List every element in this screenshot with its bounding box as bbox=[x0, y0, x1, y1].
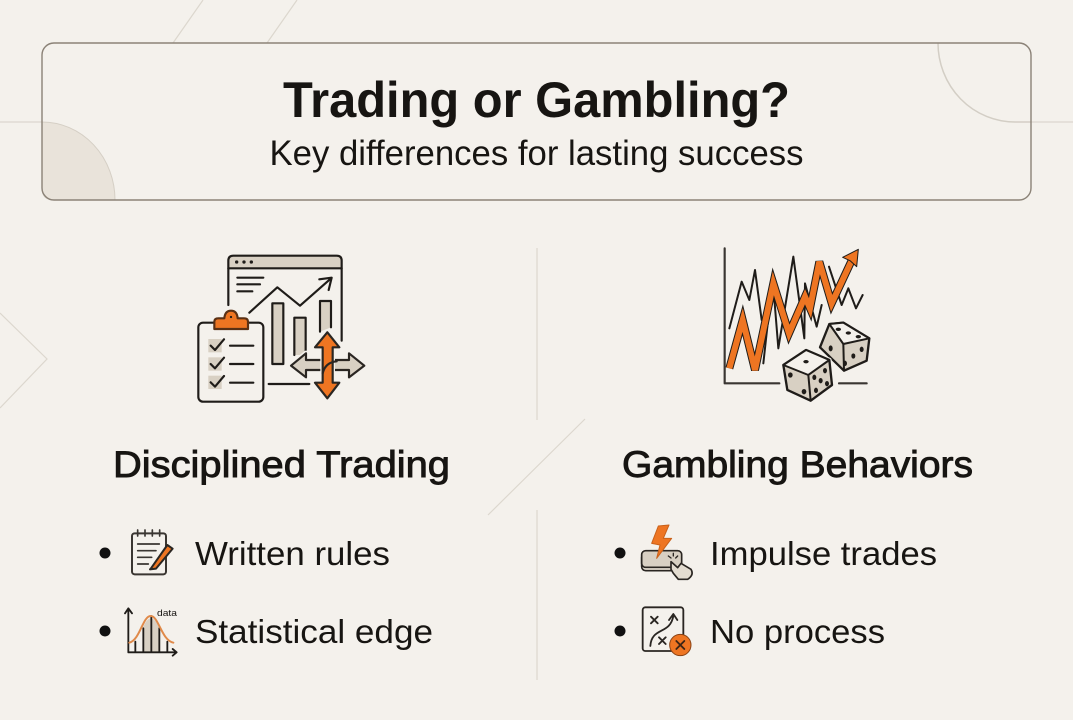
icon: bell curve chart bbox=[125, 608, 177, 656]
crossing arrows bbox=[291, 332, 364, 398]
label: No process bbox=[710, 613, 885, 650]
icon: lightning bolt and tapping hand bbox=[642, 525, 692, 579]
label: Impulse trades bbox=[710, 535, 937, 572]
heading: disciplined trading: Disciplined Trading bbox=[113, 444, 450, 485]
label: Written rules bbox=[195, 535, 390, 572]
list item: no process bbox=[614, 607, 885, 656]
icon: trading dashboard with checklist and arrows bbox=[198, 256, 364, 402]
icon: broken plan with x badge bbox=[643, 607, 691, 656]
back die bbox=[820, 323, 869, 371]
icon: notepad and pencil bbox=[132, 530, 173, 574]
icon: volatile chart with dice bbox=[725, 248, 869, 401]
list item: statistical edge bbox=[100, 608, 433, 656]
subtitle: Key differences for lasting success bbox=[270, 134, 804, 173]
clipboard bbox=[198, 311, 263, 402]
data label: data bbox=[157, 608, 178, 619]
heading: gambling behaviors: Gambling Behaviors bbox=[622, 444, 973, 485]
label: Statistical edge bbox=[195, 613, 433, 650]
front die bbox=[783, 350, 832, 401]
title: Trading or Gambling? bbox=[283, 72, 790, 128]
list item: written rules bbox=[100, 530, 390, 574]
list item: impulse trades bbox=[614, 525, 937, 579]
title panel bbox=[42, 43, 1031, 200]
